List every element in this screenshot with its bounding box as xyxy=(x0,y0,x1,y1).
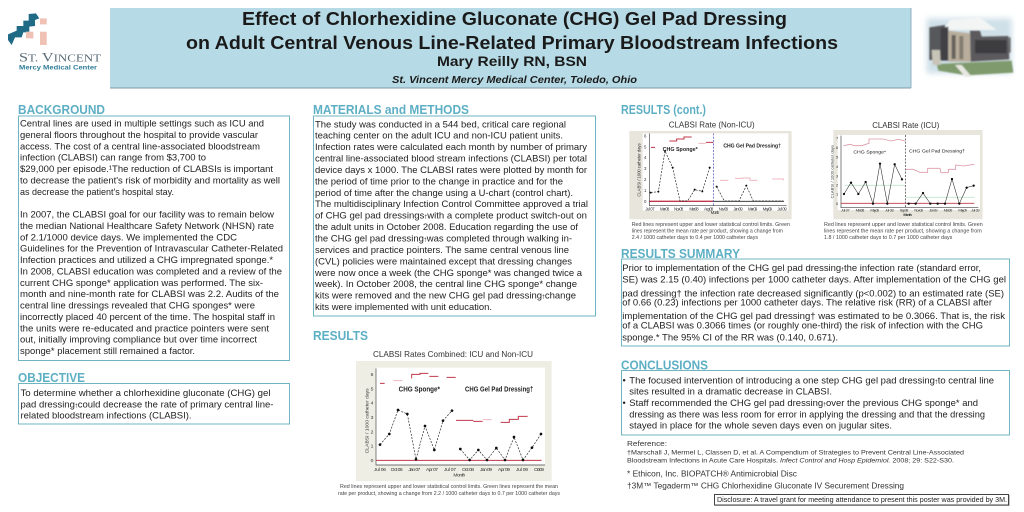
background text: the units were re-educated and practice pointers were sent xyxy=(20,323,269,333)
chart: CLABSI rate ICU xyxy=(824,120,983,241)
background text: infection (CLABSI) can range from $3,700 to xyxy=(20,153,206,163)
panel: materials and methods xyxy=(313,103,596,316)
references: †3M™ Tegaderm™ CHG Chlorhexidine Gluconate IV Securement Dressing xyxy=(627,482,904,490)
objective text: related bloodstream infections (CLABSI). xyxy=(20,411,192,421)
background text: the median National Healthcare Safety Network (NHSN) rate xyxy=(20,221,274,231)
control chart plot: CHG Gel Pad Dressing† xyxy=(723,144,781,150)
heading: results continued: RESULTS (cont.) xyxy=(621,103,706,117)
logo name: ST. V INCENT xyxy=(19,50,101,64)
heading: materials and methods: MATERIALS and METHODS xyxy=(313,103,469,117)
control chart plot: 6 xyxy=(836,145,839,150)
background text: out, initially improving compliance but over time incorrect xyxy=(20,335,257,345)
methods text: (CVL) policies were maintained except that dressing changes xyxy=(315,256,572,266)
control chart plot: Oct 08 xyxy=(462,467,474,473)
control chart plot xyxy=(829,130,983,219)
icon: staircase and cross xyxy=(8,13,47,45)
methods text: services and practice pointers. The same central venous line xyxy=(315,245,569,255)
control chart plot: Jan 07 xyxy=(408,467,421,473)
background text: In 2007, the CLABSI goal for our facility was to remain below xyxy=(20,210,274,220)
chart caption: lines represent the mean rate per product, showing a change from xyxy=(632,228,783,234)
control chart plot: 6 xyxy=(644,133,647,138)
background text: month and nine-month rate for CLABSI was 2.2. Audits of the xyxy=(20,289,279,299)
background text: central line dressings revealed that CHG sponges* were xyxy=(20,301,255,311)
references xyxy=(627,439,964,490)
control chart plot: 1 xyxy=(644,188,647,193)
chart: CLABSI rates combined xyxy=(338,349,560,497)
control chart plot: Jul 08 xyxy=(885,208,894,213)
heading: objective: OBJECTIVE xyxy=(18,371,85,385)
methods text: the period of time prior to the change in practice and for the xyxy=(315,176,563,186)
control chart plot: Mar 08 xyxy=(660,206,670,211)
methods text: device days x 1000. The CLABSI rates were plotted by month for xyxy=(315,165,587,175)
control chart plot: Nov 08 xyxy=(914,208,924,213)
conclusions text: The focused intervention of introducing a one step CHG gel pad dressing †to central line xyxy=(629,375,994,385)
references: Bloodstream Infections in Acute Care Hospitals. Infect Control and Hosp Epidemiol. 2008; 29: S22-S30. xyxy=(627,458,954,464)
background text: Central lines are used in multiple settings such as ICU and xyxy=(20,119,264,129)
methods text: Infection rates were calculated each month by number of primary xyxy=(315,142,587,152)
objective text: To determine whether a chlorhexidine gluconate (CHG) gel xyxy=(20,388,270,398)
background text: general floors throughout the hospital to provide vascular xyxy=(20,130,258,140)
methods text: kits were implemented with unit education. xyxy=(315,302,492,312)
chart caption xyxy=(338,484,560,497)
control chart plot: CLABSI / 1000 catheter days xyxy=(829,145,834,198)
chart caption xyxy=(824,222,983,241)
control chart plot: Jan 09 xyxy=(733,206,743,211)
control chart plot: CHG Sponge* xyxy=(663,147,699,153)
summary text: sponge.* The 95% CI of the RR was (0.140, 0.671). xyxy=(622,333,838,343)
control chart plot: Jan 09 xyxy=(929,208,938,213)
control chart plot: May 08 xyxy=(870,208,880,213)
control chart plot: 0 xyxy=(371,458,374,464)
methods text: teaching center on the adult ICU and non-ICU patient units. xyxy=(315,131,563,141)
control chart plot: CHG Sponge* xyxy=(399,385,440,394)
control chart plot: CHG Sponge* xyxy=(853,150,886,156)
control chart plot: Mar 08 xyxy=(689,206,699,211)
background text: access. The cost of a central line-associated bloodstream xyxy=(20,141,260,151)
conclusions text: • xyxy=(622,375,626,385)
control chart plot: Jul 06 xyxy=(374,467,386,473)
control chart plot: 4 xyxy=(644,155,647,160)
control chart plot: 3 xyxy=(644,166,647,171)
methods text: the adult units in October 2008. Education regarding the use of xyxy=(315,222,578,232)
conclusions text: • xyxy=(622,398,626,408)
chart: CLABSI rate non-ICU xyxy=(629,120,792,241)
control chart plot: May 09 xyxy=(958,208,968,213)
control chart plot: Mar 09 xyxy=(944,208,953,213)
background text: incorrectly placed 40 percent of the time. The hospital staff in xyxy=(20,312,275,322)
control chart plot: 6 xyxy=(371,372,374,378)
affiliation: St. Vincent Mercy Medical Center, Toledo, Ohio xyxy=(392,74,638,86)
control chart plot: 1 xyxy=(371,444,374,450)
methods text: kits were removed and the new CHG gel pad dressing †change xyxy=(315,291,576,301)
control chart plot: Sep 08 xyxy=(900,208,909,213)
chart caption: lines represent the mean rate per product, showing a change from xyxy=(824,228,982,234)
control chart plot: Jul 07 xyxy=(444,467,456,473)
references: †Marschall J, Mermel L, Classen D, et al. A Compendium of Strategies to Prevent Central Line-Associated xyxy=(627,450,964,456)
logo subtitle: Mercy Medical Center xyxy=(19,64,97,72)
control chart plot: Mar 09 xyxy=(748,206,758,211)
background text: current CHG sponge* application was performed. The six- xyxy=(20,278,263,288)
background text: as decrease the patient's hospital stay. xyxy=(20,187,174,197)
control chart plot: Oct 09 xyxy=(534,467,544,473)
control chart plot: Jul 09 xyxy=(777,206,787,211)
control chart plot: 5 xyxy=(371,386,374,392)
chart caption: Red lines represent upper and lower statistical control limits. Green lines represent the mean xyxy=(340,484,558,490)
control chart plot: Apr 07 xyxy=(426,467,438,473)
control chart plot: Month xyxy=(711,210,720,215)
chart caption xyxy=(632,222,790,241)
background text: Infection practices and utilized a CHG impregnated sponge.* xyxy=(20,255,273,265)
summary text: of a CLABSI was 0.3066 times (or roughly one-third) the risk of infection with the CHG xyxy=(622,320,983,330)
control chart plot: CLABSI / 1000 catheter days xyxy=(364,388,370,453)
chart title: CLABSI Rate (ICU) xyxy=(872,120,939,130)
heading: results: RESULTS xyxy=(313,329,368,343)
control chart plot: CHG Gel Pad Dressing† xyxy=(465,385,533,394)
control chart plot: 5 xyxy=(644,144,647,149)
background text: to decrease the patient's risk of morbidity and mortality as well xyxy=(20,176,280,186)
control chart plot: 2 xyxy=(836,182,839,187)
references: Reference: xyxy=(627,439,667,448)
control chart plot: Jul 07 xyxy=(841,208,850,213)
background text: In 2008, CLABSI education was completed and a review of the xyxy=(20,266,282,276)
control chart plot: 4 xyxy=(371,401,374,407)
methods text: were now once a week (the CHG sponge* was changed twice a xyxy=(314,268,583,278)
background text: Guidelines for the Prevention of Intravascular Catheter-Related xyxy=(20,244,283,254)
control chart plot: Month xyxy=(903,212,913,217)
chart title: CLABSI Rates Combined: ICU and Non-ICU xyxy=(373,349,533,359)
summary text: Prior to implementation of the CHG gel pad dressing †the infection rate (standard error, xyxy=(622,263,981,273)
chart caption: Red lines represent upper and lower statistical control limits. Green xyxy=(824,222,983,228)
control chart plot xyxy=(356,361,552,481)
conclusions text xyxy=(622,375,994,431)
methods text: of CHG gel pad dressings †with a complete product switch-out on xyxy=(315,211,587,221)
panel: results summary xyxy=(621,247,1010,346)
control chart plot: CHG Gel Pad Dressing† xyxy=(909,149,965,155)
control chart plot: Jan 09 xyxy=(480,467,492,473)
panel: objective xyxy=(18,371,290,424)
control chart plot: Oct 06 xyxy=(391,467,403,473)
methods text: central line-associated blood stream infections (CLABSI) per total xyxy=(315,154,587,164)
control chart plot: May 09 xyxy=(763,206,773,211)
control chart plot: Mar 08 xyxy=(856,208,865,213)
background text: $29,000 per episode.¹The reduction of CLABSIs is important xyxy=(20,164,273,174)
hospital photo xyxy=(927,17,1013,77)
control chart plot: CLABSI / 1000 catheter days xyxy=(637,143,642,197)
control chart plot: 4 xyxy=(836,164,839,169)
heading: conclusions: CONCLUSIONS xyxy=(621,358,708,372)
main title: Effect of Chlorhexidine Gluconate (CHG) Gel Pad Dressing xyxy=(242,9,787,29)
objective text: pad dressing †could decrease the rate of primary central line- xyxy=(20,399,274,409)
panel: background xyxy=(18,103,290,360)
background text xyxy=(20,119,283,356)
control chart plot: Apr 09 xyxy=(498,467,510,473)
control chart plot xyxy=(629,131,792,219)
control chart plot: 0 xyxy=(644,199,647,204)
summary text: implementation of the CHG gel pad dressing† was estimated to be 0.3066. That is, the risk xyxy=(622,311,1005,321)
summary text: pad dressing† the infection rate decreased significantly (p<0.002) to an estimated rate (SE) xyxy=(622,288,1004,298)
background text: of 2.1/1000 device days. We implemented the CDC xyxy=(20,232,237,242)
conclusions text: stayed in place for the whole seven days even on jugular sites. xyxy=(629,421,892,431)
methods text xyxy=(314,119,588,312)
control chart plot: 7 xyxy=(836,136,839,141)
panel: conclusions xyxy=(621,358,1010,435)
background text: sponge* placement still remained a factor. xyxy=(20,346,195,356)
control chart plot: Nov 08 xyxy=(674,206,684,211)
conclusions text: Staff recommended the CHG gel pad dressing †over the previous CHG sponge* and xyxy=(629,398,978,408)
control chart plot: 2 xyxy=(371,429,374,435)
chart caption: 2.4 / 1000 catheter days to 0.4 per 1000 catheter days xyxy=(632,235,758,241)
summary text: of 0.66 (0.23) infections per 1000 catheter days. The relative risk (RR) of a CLABSI after xyxy=(622,298,992,308)
chart caption: Red lines represent upper and lower statistical control limits. Green xyxy=(632,222,790,228)
methods text: The study was conducted in a 544 bed, critical care regional xyxy=(315,119,566,129)
references: * Ethicon, Inc. BIOPATCH® Antimicrobial Disc xyxy=(627,470,797,478)
control chart plot: 1 xyxy=(836,192,839,197)
logo: St. Vincent Mercy Medical Center xyxy=(8,13,101,71)
disclosure box: Disclosure: A travel grant for meeting attendance to present this poster was provided by 3M. xyxy=(717,495,1007,504)
control chart plot: Jul 09 xyxy=(516,467,528,473)
methods text: The multidisciplinary Infection Control Committee approved a trial xyxy=(315,199,588,209)
control chart plot: 3 xyxy=(836,173,839,178)
methods text: the CHG gel pad dressing †was completed through walking in- xyxy=(315,234,572,244)
author: Mary Reilly RN, BSN xyxy=(437,53,587,69)
methods text: week). In October 2008, the central line CHG sponge* change xyxy=(314,279,577,289)
control chart plot: Nov 08 xyxy=(719,206,729,211)
control chart plot: Jul 07 xyxy=(645,206,655,211)
control chart plot: 2 xyxy=(644,177,647,182)
chart title: CLABSI Rate (Non-ICU) xyxy=(669,120,755,130)
conclusions text: dressing as there was less room for error in applying the dressing and that the dressing xyxy=(629,409,985,419)
heading: background: BACKGROUND xyxy=(18,103,105,117)
control chart plot: Aug 08 xyxy=(704,206,714,211)
control chart plot: Month xyxy=(453,472,466,478)
objective text xyxy=(20,388,274,421)
control chart plot: Jul 09 xyxy=(971,208,980,213)
methods text: period of time after the change using a U-chart (control chart). xyxy=(315,188,573,198)
control chart plot: 5 xyxy=(836,155,839,160)
summary text xyxy=(622,263,1006,343)
control chart plot: 3 xyxy=(371,415,374,421)
summary text: SE) was 2.15 (0.40) infections per 1000 catheter days. After implementation of the CHG gel xyxy=(622,275,1006,285)
chart caption: rate per product, showing a change from 2.2 / 1000 catheter days to 0.7 per 1000 catheter days xyxy=(338,491,560,497)
chart caption: 1.8 / 1000 catheter days to 0.7 per 1000 catheter days xyxy=(824,235,952,241)
title banner xyxy=(110,8,912,88)
control chart plot: 0 xyxy=(836,201,839,206)
conclusions text: sites resulted in a dramatic decrease in CLABSI. xyxy=(629,386,832,396)
main title second line: on Adult Central Venous Line-Related Primary Bloodstream Infections xyxy=(186,33,838,53)
heading: results summary: RESULTS SUMMARY xyxy=(621,247,741,261)
